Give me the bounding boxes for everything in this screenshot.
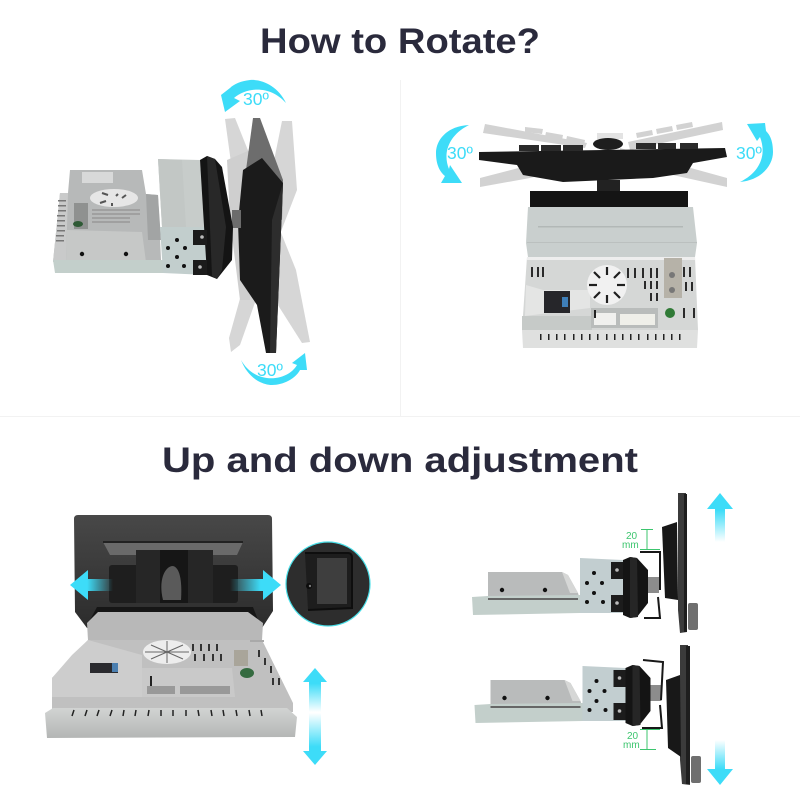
icon: arrow down [707, 740, 733, 785]
tilted grey screen [246, 118, 283, 220]
knob [688, 603, 698, 630]
fan [90, 189, 138, 207]
dimension 20 mm: 20 [627, 731, 639, 742]
panel: side view rotation [53, 118, 310, 353]
dip module [90, 663, 118, 673]
panel: side view raised [472, 493, 698, 633]
bolts bracket [664, 258, 682, 298]
top bar [103, 542, 243, 555]
icon: horizontal arrow right [230, 570, 281, 600]
label: 30º [736, 143, 762, 163]
knob [691, 756, 701, 783]
callout: detail circle [286, 542, 370, 626]
cable [161, 566, 181, 600]
icon: vertical arrow down [303, 713, 327, 765]
black edge [90, 607, 258, 620]
dimension 20 mm: mm [623, 740, 640, 751]
chassis [474, 665, 662, 726]
top cover [158, 159, 207, 227]
label: 30º [447, 143, 473, 163]
backing [662, 522, 678, 600]
screen [678, 493, 687, 633]
rear chassis [53, 170, 161, 262]
dimension 20 mm [623, 730, 660, 751]
screen [680, 645, 690, 785]
icon: arrow 30 degree left [436, 125, 473, 183]
chassis [472, 557, 659, 618]
title: how to rotate: How to Rotate? [260, 22, 540, 61]
stem [232, 210, 241, 228]
panel: top view rotation [479, 122, 727, 348]
fan [587, 265, 627, 305]
bottom rail [522, 330, 698, 348]
bottom rail [45, 708, 297, 738]
green button [240, 668, 254, 678]
title: up and down adjustment: Up and down adjustment [162, 441, 638, 480]
ghost screens [225, 118, 310, 352]
icon: arrow up [707, 493, 733, 542]
connector tray [142, 668, 235, 697]
screen [74, 515, 273, 628]
back plate [522, 257, 698, 330]
fan [143, 640, 191, 664]
vents [531, 267, 695, 318]
dark screen [238, 158, 283, 353]
icon: arrow 30 degree right [736, 123, 773, 182]
connector tray [591, 308, 658, 328]
bracket [109, 565, 238, 603]
mounting plate [160, 227, 207, 275]
icon: vertical arrow up [303, 668, 327, 712]
rear plate [52, 640, 293, 712]
dimension 20 mm [622, 530, 660, 551]
front band [530, 191, 688, 207]
dimension 20 mm: 20 [626, 531, 638, 542]
label: 30º [257, 360, 283, 380]
label: 30º [243, 89, 269, 109]
icon: arrow 30 degree bottom [241, 353, 307, 385]
dimension 20 mm: mm [622, 540, 639, 551]
front bezel [200, 156, 233, 279]
panel: rear view adjustment [45, 515, 297, 738]
top cover [526, 207, 697, 257]
black screen [479, 148, 727, 182]
ghost screens [480, 122, 727, 187]
green button [665, 308, 675, 318]
clips [640, 552, 660, 618]
clips [642, 660, 663, 728]
icon: horizontal arrow left [70, 570, 113, 600]
backing [666, 675, 681, 757]
dip module [544, 291, 570, 313]
icon: arrow 30 degree top [221, 80, 286, 112]
top cover [87, 612, 263, 640]
panel: side view lowered [474, 645, 701, 785]
bolts [234, 650, 248, 666]
